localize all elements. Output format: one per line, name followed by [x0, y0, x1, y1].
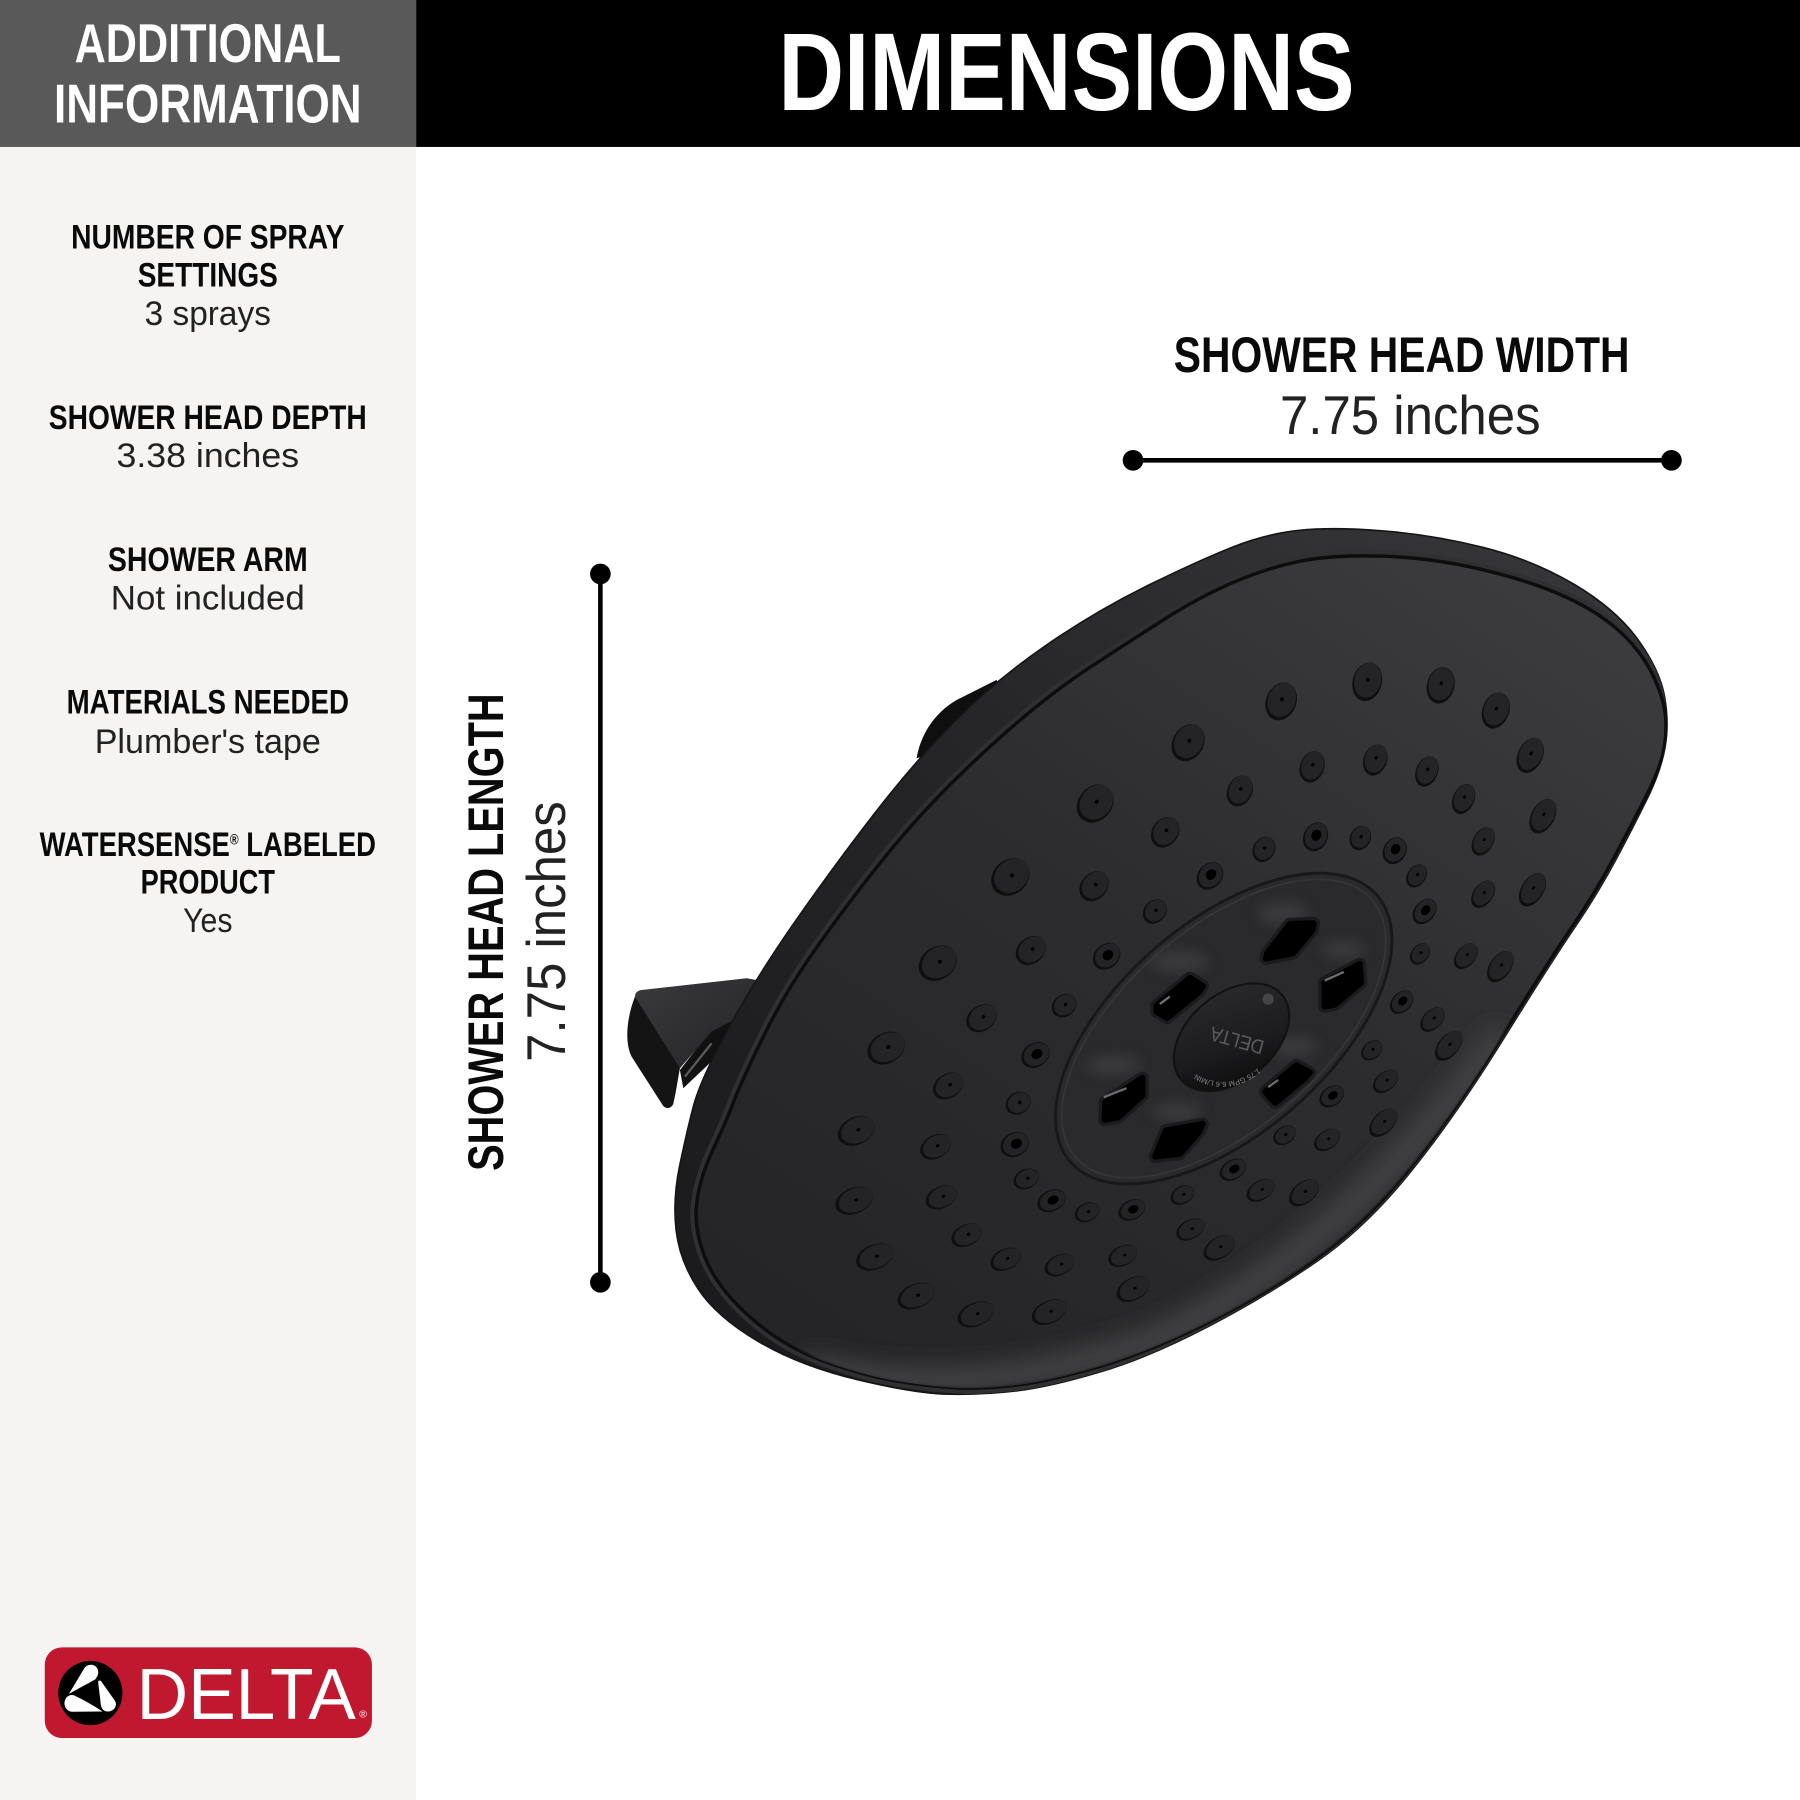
header: additional information [0, 0, 416, 147]
spec: watersense labeled product [40, 826, 376, 940]
spec: watersense labeled product: Yes [183, 902, 232, 940]
spec: materials needed: MATERIALS NEEDED [67, 683, 349, 721]
nozzle highlights [1087, 902, 1365, 1121]
spec: watersense labeled product: LABELED [239, 826, 376, 864]
dimension: shower head length [457, 564, 611, 1293]
spec: shower arm: SHOWER ARM [108, 541, 308, 579]
header: dimensions title [416, 0, 1800, 147]
center spray disc [1054, 872, 1394, 1186]
dimension: shower head width [1123, 326, 1682, 471]
logo: delta: ® [359, 1709, 367, 1720]
spec: number of spray settings: 3 sprays [145, 295, 271, 333]
spec: shower arm: Not included [111, 580, 305, 618]
spec: shower head depth: 3.38 inches [117, 437, 299, 475]
spec: watersense labeled product: PRODUCT [141, 864, 275, 902]
head body [675, 529, 1667, 1394]
outlet glints [1104, 972, 1344, 1097]
square spray outlet surrounds [1105, 923, 1361, 1157]
dimension: shower head width: 7.75 inches [1280, 384, 1541, 446]
logo: delta [45, 1647, 372, 1738]
spec: shower arm [108, 541, 308, 618]
inner ring of spray nozzles [996, 818, 1442, 1226]
swivel lever [627, 978, 757, 1108]
illustration: shower head [627, 528, 1668, 1396]
outer ring of spray nozzles [831, 659, 1562, 1332]
dimension: shower head width: SHOWER HEAD WIDTH [1174, 326, 1630, 383]
spec: number of spray settings [71, 219, 344, 333]
center spray disc: DELTA [1207, 1022, 1267, 1058]
dimension: shower head length: 7.75 inches [515, 801, 577, 1062]
sidebar panel background [0, 147, 416, 1800]
header: dimensions title: DIMENSIONS [778, 11, 1355, 134]
center cap [1153, 962, 1310, 1113]
spec: number of spray settings: SETTINGS [138, 256, 278, 294]
logo: delta: DELTA [137, 1655, 357, 1735]
spec: materials needed [67, 683, 349, 761]
spec: shower head depth: SHOWER HEAD DEPTH [49, 399, 367, 437]
header: additional information: INFORMATION [54, 72, 362, 134]
dimension: shower head length: SHOWER HEAD LENGTH [457, 693, 514, 1171]
header: additional information: ADDITIONAL [75, 12, 341, 74]
spec: watersense labeled product: ® [230, 831, 239, 848]
rim band and spray face [696, 556, 1666, 1388]
square spray outlets [1105, 923, 1361, 1157]
spec: watersense labeled product: WATERSENSE [40, 826, 278, 864]
spec: shower head depth [49, 399, 367, 475]
spec: materials needed: Plumber's tape [95, 723, 321, 761]
middle ring of spray nozzles [916, 741, 1500, 1281]
spec: number of spray settings: NUMBER OF SPRAY [71, 219, 344, 257]
rear knob [917, 680, 1003, 758]
center spray disc: 1.75 GPM 6.6 L/MIN [1194, 1068, 1260, 1087]
